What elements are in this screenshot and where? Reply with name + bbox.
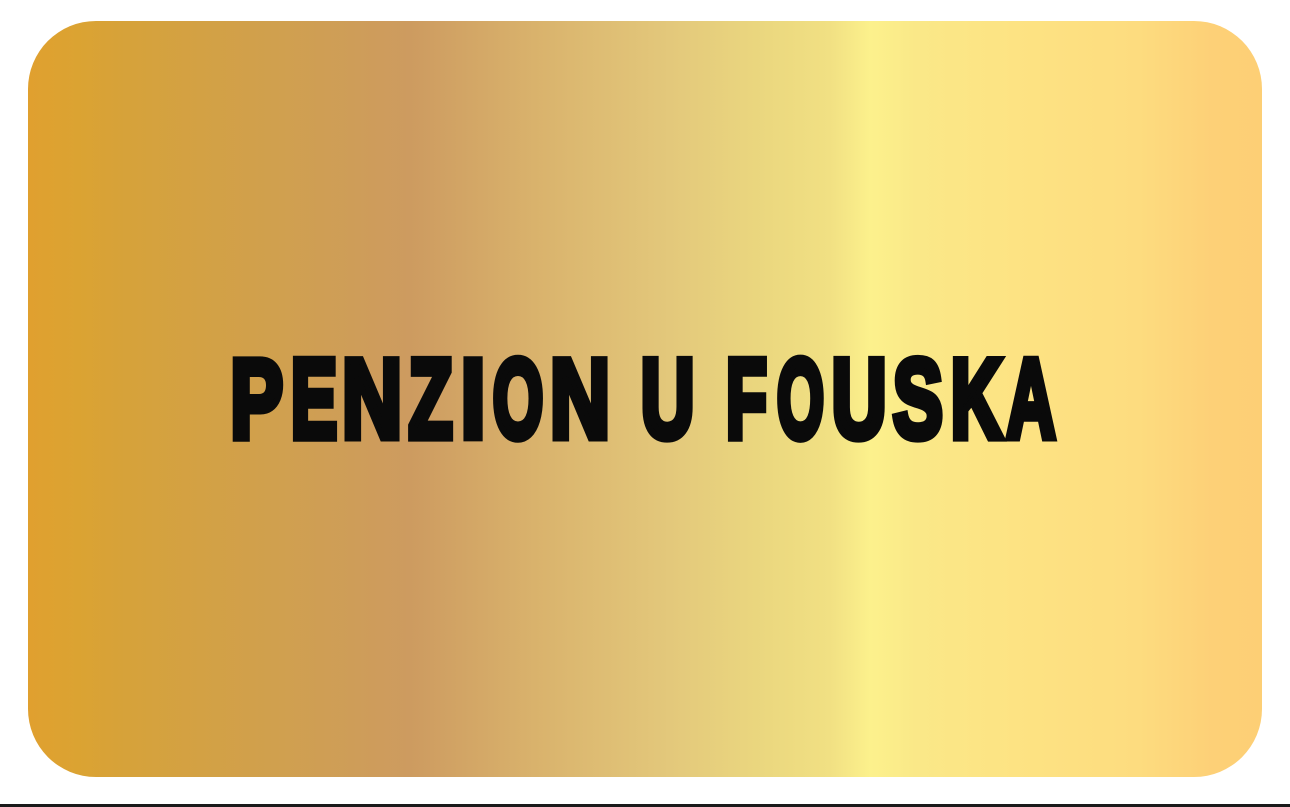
title: Z (409, 336, 453, 461)
title: N (550, 337, 610, 461)
title: N (342, 337, 402, 461)
title: O (493, 337, 543, 462)
bottom border line (0, 804, 1290, 807)
title: E (291, 337, 337, 462)
title: U (832, 337, 887, 462)
title: K (951, 336, 1002, 461)
title: U (641, 337, 694, 462)
title: S (893, 338, 943, 462)
title: F (726, 336, 767, 462)
title: I (460, 336, 486, 462)
title: P (230, 336, 283, 462)
title: O (777, 338, 824, 462)
title: A (1006, 336, 1056, 462)
